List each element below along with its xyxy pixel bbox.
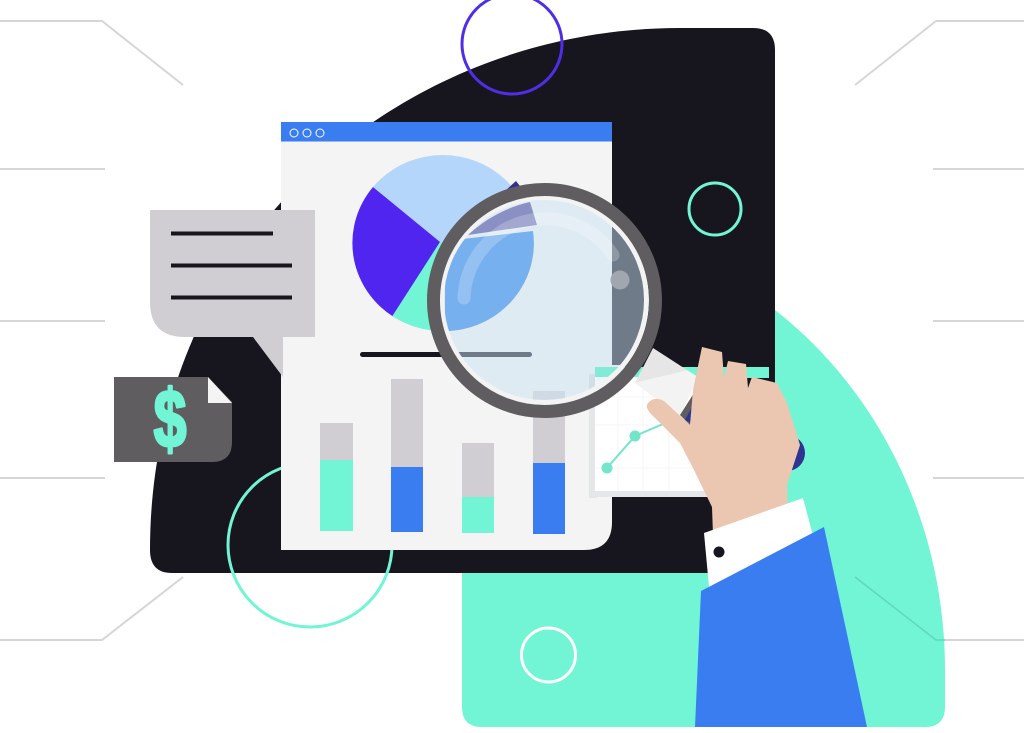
dollar file icon — [114, 374, 232, 465]
purple ring — [462, 0, 562, 94]
shirt cuff — [704, 498, 820, 595]
lens contents — [444, 200, 644, 400]
window buttons — [290, 129, 324, 137]
mint background panel — [462, 310, 945, 727]
dollar file icon: $ — [154, 374, 186, 465]
bar chart — [320, 379, 565, 534]
speech bubble — [150, 210, 315, 377]
document header bar — [281, 122, 612, 142]
hand — [647, 347, 800, 535]
handle grip — [680, 393, 700, 425]
large mint ring — [228, 463, 392, 627]
document body — [281, 122, 612, 550]
small mint ring — [689, 183, 741, 235]
lens ring — [442, 198, 646, 402]
report document — [281, 122, 612, 550]
connector line over mint — [855, 577, 945, 640]
caption line — [360, 352, 532, 357]
white ring — [522, 628, 576, 682]
magnifying glass — [430, 190, 805, 471]
dark background panel — [150, 28, 775, 573]
pie chart exploded tip — [505, 181, 523, 191]
blue sleeve — [695, 527, 867, 727]
pie chart — [352, 155, 511, 330]
line chart sheet — [589, 348, 769, 498]
